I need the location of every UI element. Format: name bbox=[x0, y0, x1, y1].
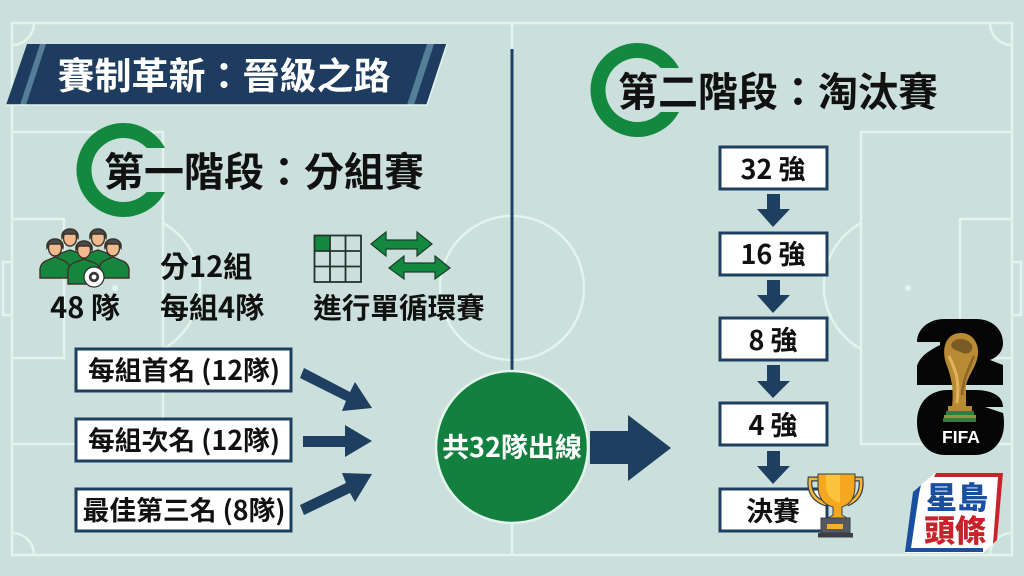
box: round of 32: 32 強 bbox=[740, 148, 806, 187]
label: round robin: 進行單循環賽 bbox=[313, 286, 485, 327]
title banner bbox=[6, 44, 447, 105]
arrow: to knockout stage bbox=[590, 415, 671, 481]
box: last four: 4 強 bbox=[748, 404, 798, 443]
arrow: 8 to 4 bbox=[757, 365, 790, 398]
circle: 32 teams qualify: 共32隊出線 bbox=[442, 426, 582, 465]
label: 48 teams: 48 隊 bbox=[50, 285, 120, 327]
box: best third place: 最佳第三名 (8隊) bbox=[83, 489, 285, 528]
icon: football bbox=[84, 267, 104, 287]
logo: FIFA World Cup 26 bbox=[917, 319, 1004, 455]
box: last four bbox=[720, 403, 827, 445]
arrow: winners to qualifiers bbox=[300, 368, 372, 411]
box: final: 決賽 bbox=[746, 490, 800, 529]
trophy bbox=[943, 333, 978, 422]
arrow: runners-up to qualifiers bbox=[303, 425, 372, 457]
box: round of 32 bbox=[720, 147, 827, 189]
numeral 6 bbox=[917, 390, 1004, 455]
knockout bracket bbox=[720, 147, 827, 531]
text: twelve groups: 每組4隊 bbox=[160, 285, 264, 327]
box: group winners: 每組首名 (12隊) bbox=[88, 349, 280, 388]
logo: Sing Tao Headline: 星島 bbox=[926, 473, 988, 518]
heading: stage two: 第二階段：淘汰賽 bbox=[618, 60, 938, 118]
heading: stage two bbox=[590, 43, 938, 137]
box: final bbox=[720, 489, 827, 531]
arrow: 4 to final bbox=[757, 451, 790, 484]
title banner: 賽制革新：晉級之路 bbox=[58, 46, 390, 100]
box: round of 16 bbox=[720, 233, 827, 275]
divider line bbox=[510, 49, 514, 370]
text: twelve groups: 分12組 bbox=[160, 244, 252, 286]
heading: stage one bbox=[76, 123, 424, 217]
icon: team of players bbox=[40, 229, 129, 287]
logo: Sing Tao Headline bbox=[905, 473, 1003, 553]
box: round of 16: 16 強 bbox=[740, 233, 806, 272]
logo: Sing Tao Headline: 頭條 bbox=[924, 506, 986, 551]
arrow: 32 to 16 bbox=[757, 194, 790, 227]
circle: 32 teams qualify bbox=[436, 371, 588, 523]
heading: stage one: 第一階段：分組賽 bbox=[104, 140, 424, 198]
arrow: 16 to 8 bbox=[757, 280, 790, 313]
box: group runners-up: 每組次名 (12隊) bbox=[88, 419, 280, 458]
text: twelve groups bbox=[160, 244, 264, 327]
box: last eight bbox=[720, 318, 827, 360]
numeral 2 bbox=[917, 319, 1003, 385]
icon: gold trophy bbox=[810, 474, 861, 538]
icon: group table and swap arrows bbox=[314, 232, 450, 282]
logo: FIFA World Cup 26: FIFA bbox=[942, 427, 980, 447]
arrow: third place to qualifiers bbox=[300, 473, 372, 515]
box: last eight: 8 強 bbox=[748, 319, 798, 358]
